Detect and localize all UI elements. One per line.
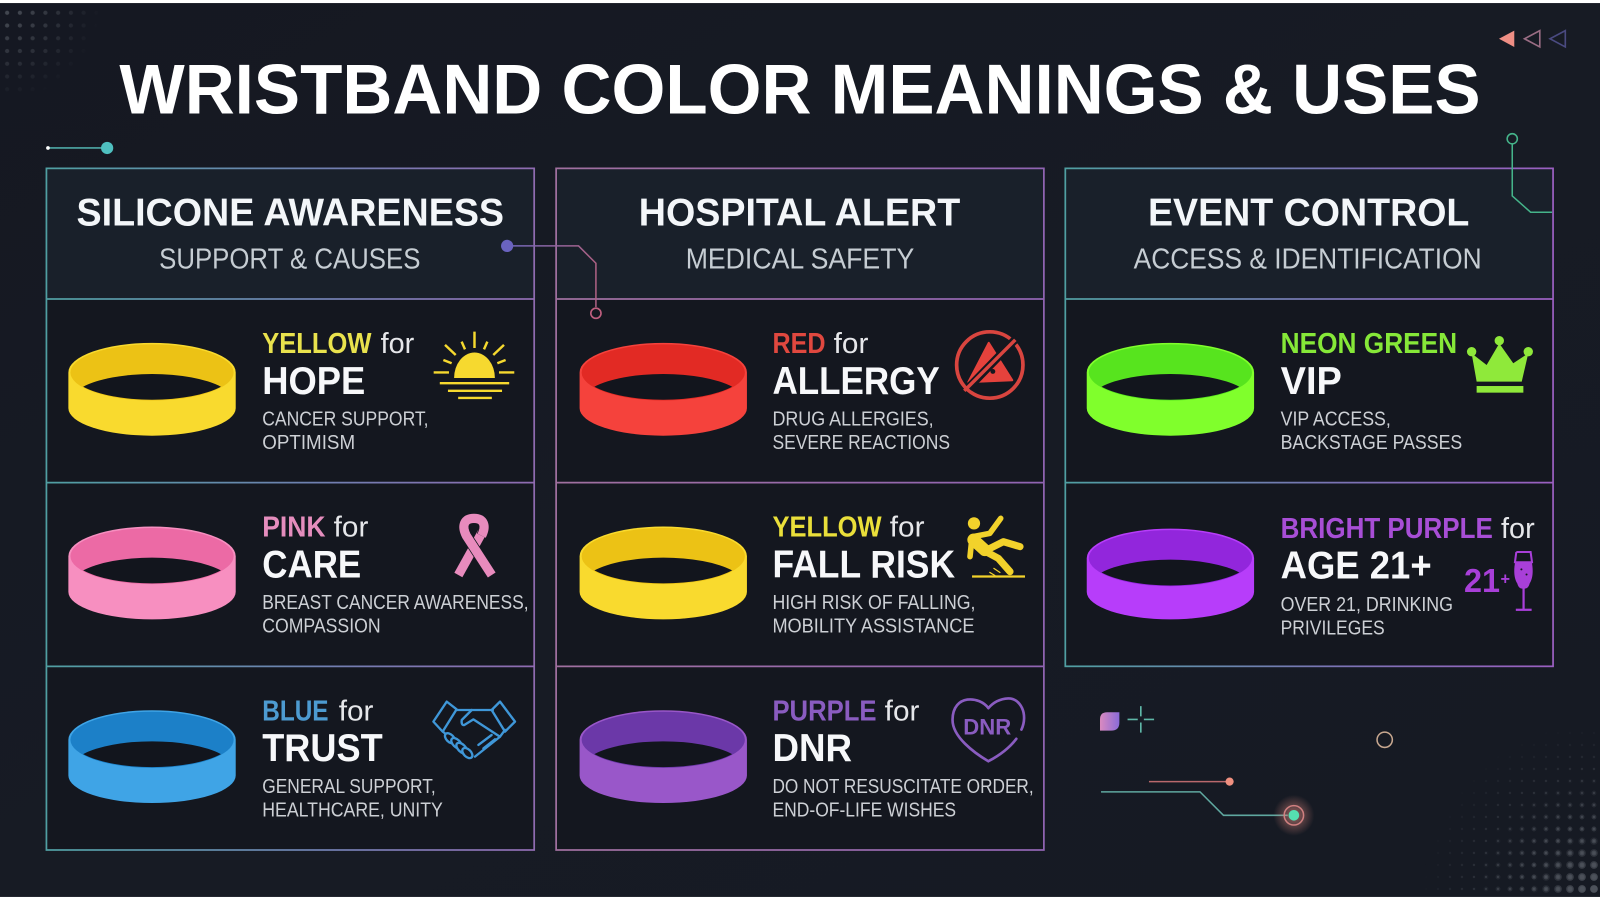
- icon: 21+ wine glass: 21: [1464, 563, 1500, 600]
- connector: top left node: [46, 142, 113, 154]
- text: bright purple for age 21+: for: [1501, 513, 1535, 545]
- text: neon green vip: BACKSTAGE PASSES: [1281, 432, 1462, 454]
- text: purple for dnr: [772, 695, 1034, 821]
- icon: dnr heart: DNR: [963, 715, 1011, 740]
- icon: 21+ wine glass: +: [1501, 571, 1510, 589]
- decoration: teal circuit line with glowing node: [1101, 792, 1314, 836]
- text: yellow for hope: for: [381, 328, 415, 360]
- text: yellow for fall risk: MOBILITY ASSISTANCE: [772, 616, 974, 638]
- heading: hospital alert: [639, 192, 961, 275]
- row: yellow hope: [68, 328, 514, 454]
- text: pink for care: [262, 512, 529, 638]
- wristband: purple: [580, 710, 747, 803]
- icon: ribbon: [458, 518, 492, 575]
- row: yellow fall risk: [580, 512, 1025, 638]
- decoration: triangles top right: [1499, 31, 1565, 47]
- text: bright purple for age 21+: OVER 21, DRINKING: [1281, 594, 1453, 616]
- text: bright purple for age 21+: PRIVILEGES: [1281, 618, 1385, 640]
- text: purple for dnr: END-OF-LIFE WISHES: [772, 799, 956, 821]
- decoration: leaf and cross: [1100, 706, 1154, 733]
- text: yellow for fall risk: HIGH RISK OF FALLING,: [772, 592, 976, 614]
- heading: silicone awareness: [77, 192, 504, 275]
- icon: 21+ wine glass: [1464, 552, 1533, 611]
- text: blue for trust: HEALTHCARE, UNITY: [262, 799, 443, 821]
- text: yellow for hope: YELLOW: [262, 328, 371, 360]
- text: pink for care: CARE: [262, 544, 361, 587]
- row: bright purple age 21+: [1087, 513, 1535, 640]
- text: bright purple for age 21+: AGE 21+: [1281, 545, 1432, 588]
- row: purple dnr: [580, 695, 1034, 821]
- text: red for allergy: RED: [772, 328, 826, 360]
- wristband: yellow: [580, 527, 747, 619]
- text: purple for dnr: for: [885, 695, 920, 727]
- heading: silicone awareness: SUPPORT & CAUSES: [159, 243, 420, 275]
- text: purple for dnr: PURPLE: [772, 695, 877, 727]
- decoration: pink line with dot: [1149, 778, 1234, 786]
- text: bright purple for age 21+: BRIGHT PURPLE: [1281, 513, 1493, 545]
- text: blue for trust: TRUST: [262, 727, 383, 770]
- text: pink for care: PINK: [262, 512, 326, 544]
- text: purple for dnr: DO NOT RESUSCITATE ORDER,: [772, 776, 1034, 798]
- heading: event control: EVENT CONTROL: [1148, 192, 1469, 235]
- wristband: red: [580, 343, 747, 436]
- text: yellow for fall risk: [772, 512, 976, 638]
- icon: dnr heart: [953, 698, 1024, 761]
- text: yellow for hope: [262, 328, 429, 454]
- title: WRISTBAND COLOR MEANINGS & USES: [119, 49, 1481, 128]
- text: red for allergy: for: [834, 328, 869, 360]
- heading: hospital alert: HOSPITAL ALERT: [639, 192, 961, 235]
- text: yellow for fall risk: FALL RISK: [772, 544, 955, 587]
- heading: hospital alert: MEDICAL SAFETY: [686, 243, 914, 275]
- heading: silicone awareness: SILICONE AWARENESS: [77, 192, 504, 235]
- text: blue for trust: BLUE: [262, 695, 329, 727]
- wristband: blue: [68, 710, 236, 803]
- text: red for allergy: ALLERGY: [772, 360, 940, 403]
- connector: header to hospital panel: [501, 240, 601, 318]
- panel: silicone awareness: [46, 168, 534, 850]
- text: blue for trust: for: [339, 695, 374, 727]
- text: yellow for fall risk: YELLOW: [772, 512, 882, 544]
- text: red for allergy: DRUG ALLERGIES,: [772, 409, 934, 431]
- text: bright purple for age 21+: [1281, 513, 1535, 640]
- icon: falling person: [968, 517, 1025, 577]
- text: neon green vip: [1281, 328, 1462, 454]
- text: yellow for hope: CANCER SUPPORT,: [262, 409, 429, 431]
- decoration: ring: [1377, 732, 1392, 747]
- text: purple for dnr: DNR: [772, 727, 852, 770]
- row: neon green vip: [1087, 328, 1533, 454]
- text: yellow for fall risk: for: [890, 512, 925, 544]
- panel: event control: [1065, 168, 1553, 666]
- row: pink care: [68, 512, 529, 638]
- text: yellow for hope: HOPE: [262, 360, 365, 403]
- panel: hospital alert: [556, 168, 1044, 850]
- text: blue for trust: [262, 695, 443, 821]
- icon: no allergy warning: [957, 332, 1023, 398]
- heading: event control: ACCESS & IDENTIFICATION: [1134, 243, 1482, 275]
- connector: top right green: [1507, 134, 1552, 212]
- heading: event control: [1134, 192, 1482, 275]
- text: pink for care: for: [334, 512, 369, 544]
- text: pink for care: COMPASSION: [262, 616, 381, 638]
- text: neon green vip: VIP: [1281, 360, 1342, 403]
- text: blue for trust: GENERAL SUPPORT,: [262, 776, 436, 798]
- wristband: yellow: [68, 343, 236, 436]
- text: neon green vip: NEON GREEN: [1281, 328, 1457, 360]
- text: yellow for hope: OPTIMISM: [262, 432, 355, 454]
- wristband: neon green: [1087, 343, 1254, 436]
- row: red allergy: [580, 328, 1023, 454]
- wristband: bright purple: [1087, 529, 1254, 619]
- text: red for allergy: [772, 328, 950, 454]
- icon: sun: [434, 332, 514, 398]
- text: pink for care: BREAST CANCER AWARENESS,: [262, 592, 529, 614]
- icon: handshake: [433, 702, 515, 760]
- text: neon green vip: VIP ACCESS,: [1281, 409, 1391, 431]
- row: blue trust: [68, 695, 515, 821]
- wristband: pink: [68, 527, 236, 619]
- text: red for allergy: SEVERE REACTIONS: [772, 432, 950, 454]
- icon: crown: [1467, 336, 1533, 393]
